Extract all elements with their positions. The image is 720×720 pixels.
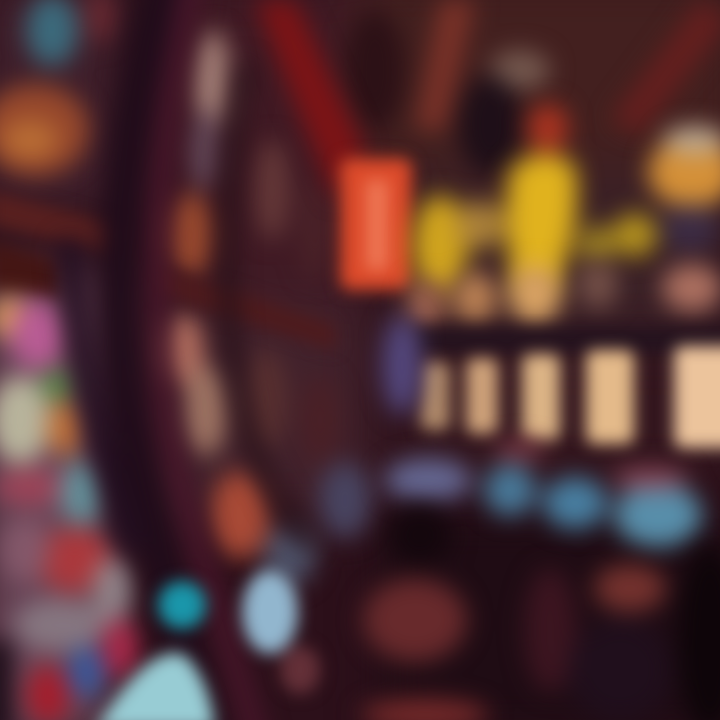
left upper shelf [0, 0, 116, 176]
yellow figures [412, 104, 720, 295]
lit cream screen row [420, 346, 720, 448]
purple side panel [382, 315, 422, 415]
blue button row [384, 441, 702, 547]
red hanging banner [255, 0, 365, 200]
red-orange sign panel [340, 158, 412, 290]
left shelf beam [0, 190, 120, 300]
dark aisle seats and floor [361, 505, 720, 720]
middle shelves [160, 30, 371, 585]
middle shelf beam [160, 265, 335, 350]
left colourful machine column [0, 296, 138, 720]
curved dark pillars [70, 0, 305, 720]
bottom-left lights [95, 570, 320, 720]
upper lit panel row [407, 261, 720, 331]
ceiling beams [345, 0, 720, 175]
dark horizontal band [410, 328, 720, 352]
